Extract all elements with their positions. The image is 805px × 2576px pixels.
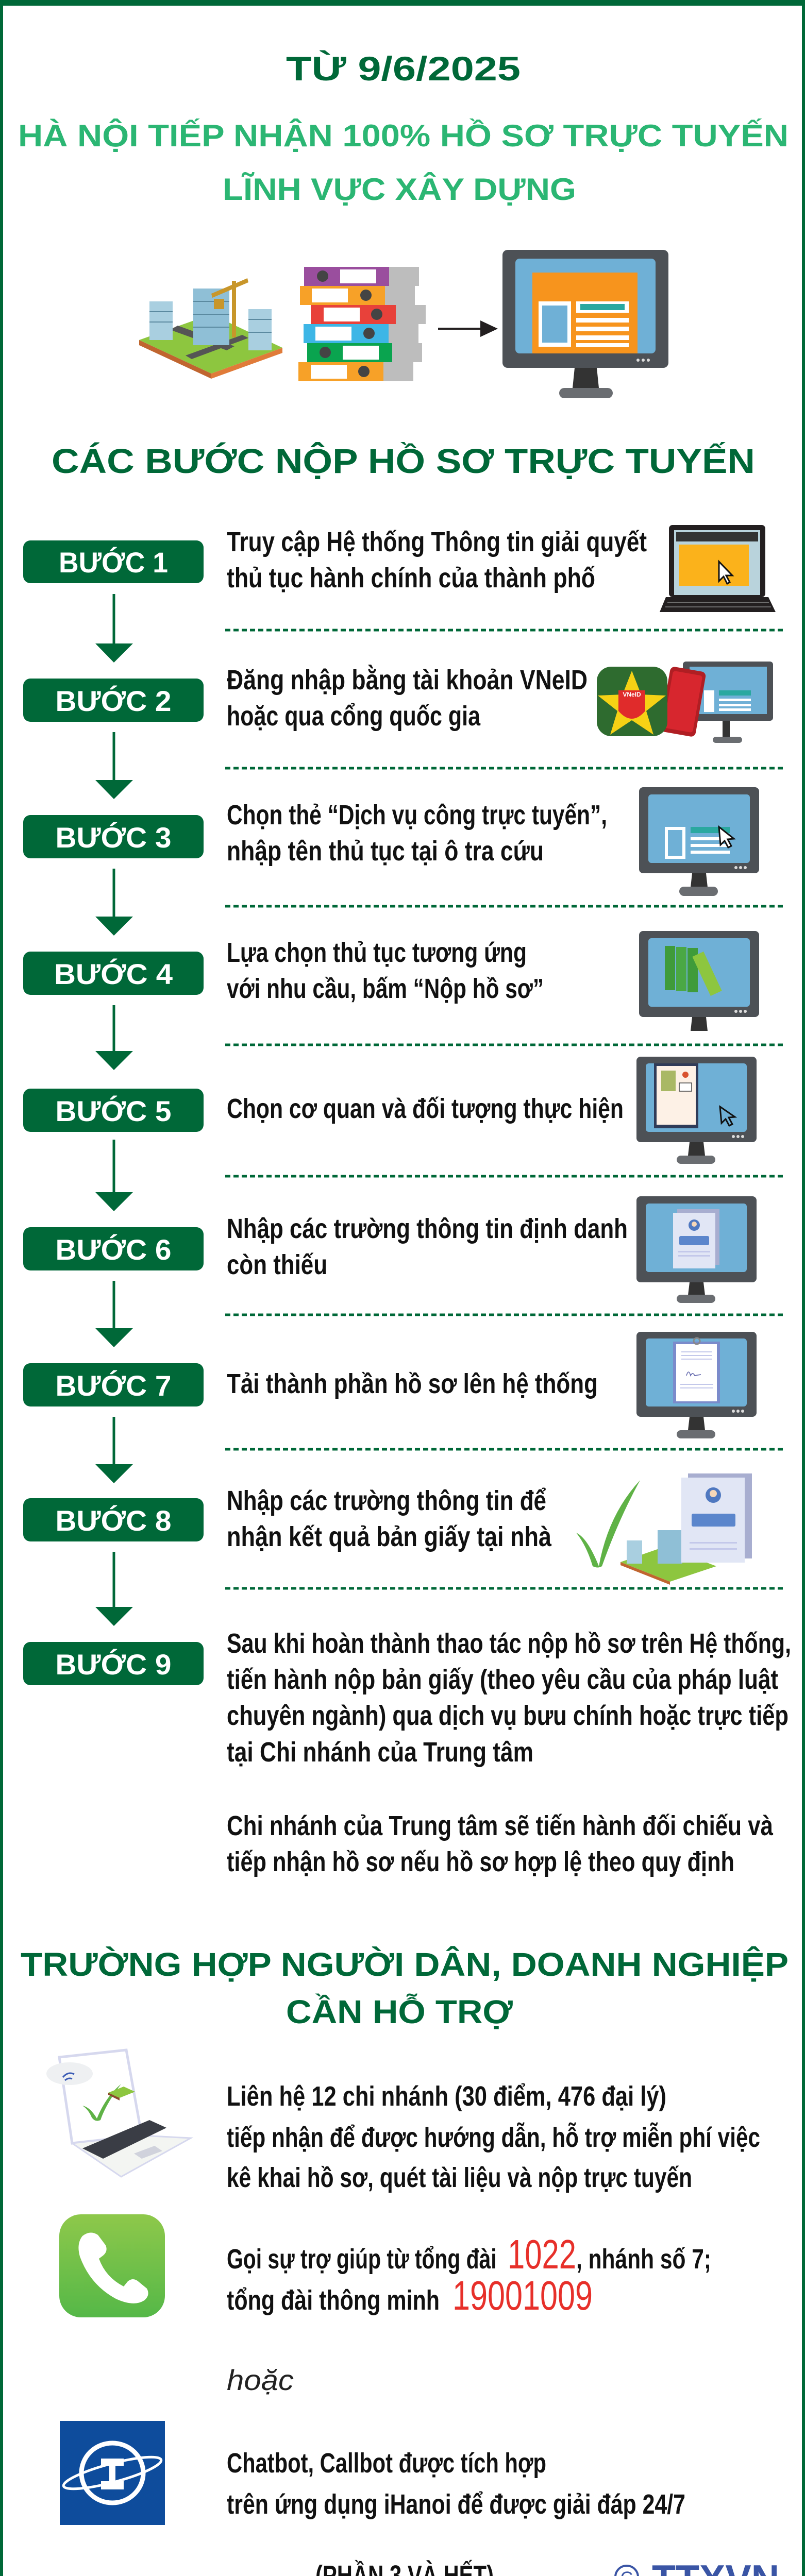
icon: VNeID app, phone, monitor: [597, 662, 773, 743]
step 6: [23, 1196, 757, 1303]
icon: iHanoi: [60, 2421, 165, 2525]
step 5: BƯỚC 5: [56, 1095, 171, 1127]
icon: VNeID app, phone, monitor: VNeID: [623, 691, 641, 698]
step 4: với nhu cầu, bấm “Nộp hồ sơ”: [227, 973, 544, 1004]
icon: laptop: [660, 525, 776, 612]
icon: monitor with profile document: [636, 1196, 757, 1303]
step 4: Lựa chọn thủ tục tương ứng: [227, 937, 527, 968]
illustration: big monitor: [502, 250, 668, 398]
step 3: Chọn thẻ “Dịch vụ công trực tuyến”,: [227, 800, 607, 831]
support 1: laptop + branches: [46, 2050, 760, 2193]
step 7: BƯỚC 7: [56, 1369, 171, 1402]
step 3: [23, 787, 759, 896]
step 9: tại Chi nhánh của Trung tâm: [227, 1737, 533, 1768]
support 3: iHanoi chatbot: [60, 2421, 685, 2525]
step 5: Chọn cơ quan và đối tượng thực hiện: [227, 1093, 624, 1124]
support 3: iHanoi chatbot: Chatbot, Callbot được tích hợp: [227, 2448, 546, 2479]
icon: monitor with form: [636, 1057, 757, 1164]
step 5: [23, 1057, 757, 1164]
support 2: phone hotline: Gọi sự trợ giúp từ tổng đài: [227, 2244, 502, 2275]
icon: monitor with binders: [639, 931, 759, 1031]
step 4: [23, 931, 759, 1031]
text: or: hoặc: [227, 2364, 294, 2396]
step 8: nhận kết quả bản giấy tại nhà: [227, 1521, 552, 1552]
icon: monitor with cursor: [639, 787, 759, 896]
step 6: còn thiếu: [227, 1249, 327, 1280]
illustration: binders: [298, 267, 426, 381]
heading: support: TRƯỜNG HỢP NGƯỜI DÂN, DOANH NGHIỆP: [21, 1945, 789, 1983]
support 1: laptop + branches: Liên hệ 12 chi nhánh (30 điểm, 476 đại lý): [227, 2081, 666, 2112]
support 3: iHanoi chatbot: trên ứng dụng iHanoi để được giải đáp 24/7: [227, 2489, 685, 2520]
heading: steps: CÁC BƯỚC NỘP HỒ SƠ TRỰC TUYẾN: [52, 442, 755, 481]
step 1: BƯỚC 1: [59, 546, 168, 579]
icon: monitor with clipboard: [636, 1332, 757, 1438]
support 2: phone hotline: 19001009: [452, 2273, 593, 2318]
icon: check, city, document: [576, 1473, 752, 1585]
step 8: [23, 1473, 752, 1585]
illustration: construction city: [139, 278, 282, 379]
support 2: phone hotline: , nhánh số 7;: [576, 2244, 711, 2275]
step 1: Truy cập Hệ thống Thông tin giải quyết: [227, 527, 647, 557]
heading: support: CẦN HỖ TRỢ: [286, 1993, 513, 2030]
step 8: Nhập các trường thông tin để: [227, 1485, 546, 1516]
step 3: BƯỚC 3: [56, 821, 171, 854]
support 1: laptop + branches: kê khai hồ sơ, quét tài liệu và nộp trực tuyến: [227, 2162, 692, 2193]
step 7: [23, 1332, 757, 1438]
title: [18, 49, 789, 207]
step 6: Nhập các trường thông tin định danh: [227, 1213, 628, 1244]
step 6: BƯỚC 6: [56, 1233, 171, 1266]
title: TỪ 9/6/2025: [286, 49, 521, 88]
support 2: phone hotline: [59, 2214, 711, 2318]
step 2: [23, 662, 773, 743]
icon: laptop with check: [46, 2050, 191, 2177]
step 7: Tải thành phần hồ sơ lên hệ thống: [227, 1368, 598, 1399]
step 9: [23, 1628, 791, 1877]
step 2: Đăng nhập bằng tài khoản VNeID: [227, 665, 588, 696]
step 3: nhập tên thủ tục tại ô tra cứu: [227, 836, 544, 867]
step 4: BƯỚC 4: [54, 958, 173, 990]
step 2: BƯỚC 2: [56, 685, 171, 717]
step 1: [23, 525, 776, 612]
title: HÀ NỘI TIẾP NHẬN 100% HỒ SƠ TRỰC TUYẾN: [18, 118, 789, 153]
support 2: phone hotline: 1022: [508, 2231, 576, 2277]
icon: phone: [59, 2214, 165, 2317]
step 9: BƯỚC 9: [56, 1648, 171, 1681]
step 2: hoặc qua cổng quốc gia: [227, 701, 481, 732]
step 1: thủ tục hành chính của thành phố: [227, 563, 595, 594]
step 8: BƯỚC 8: [56, 1504, 171, 1537]
heading: support: [21, 1945, 789, 2030]
step connector arrows: [95, 594, 133, 1626]
title: LĨNH VỰC XÂY DỰNG: [223, 172, 576, 207]
support 2: phone hotline: tổng đài thông minh: [227, 2285, 446, 2316]
arrow to monitor: [438, 320, 498, 337]
